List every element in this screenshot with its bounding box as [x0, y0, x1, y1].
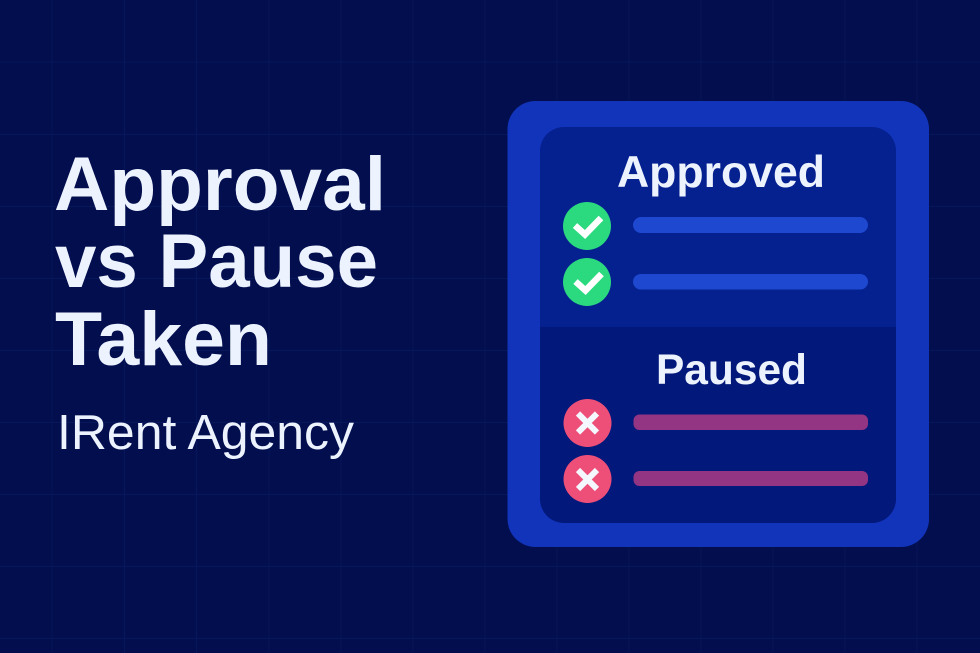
icon: green check 2	[563, 258, 611, 306]
paused bar 1	[634, 414, 868, 430]
icon: red cross 1	[564, 399, 612, 447]
title: Approval	[54, 142, 386, 227]
title	[54, 142, 386, 382]
approved bar 2	[633, 274, 868, 290]
panel: paused section	[540, 327, 896, 523]
subtitle: IRent Agency	[57, 405, 354, 460]
title: Taken	[55, 297, 272, 382]
approved bar 1	[633, 217, 868, 233]
heading: paused: Paused	[656, 346, 807, 394]
title: vs Pause	[55, 219, 378, 304]
icon: green check 1	[563, 202, 611, 250]
heading: approved: Approved	[617, 148, 825, 197]
panel: status card	[508, 101, 929, 547]
panel: approved section	[540, 127, 896, 327]
paused bar 2	[634, 471, 868, 486]
icon: red cross 2	[564, 455, 612, 503]
